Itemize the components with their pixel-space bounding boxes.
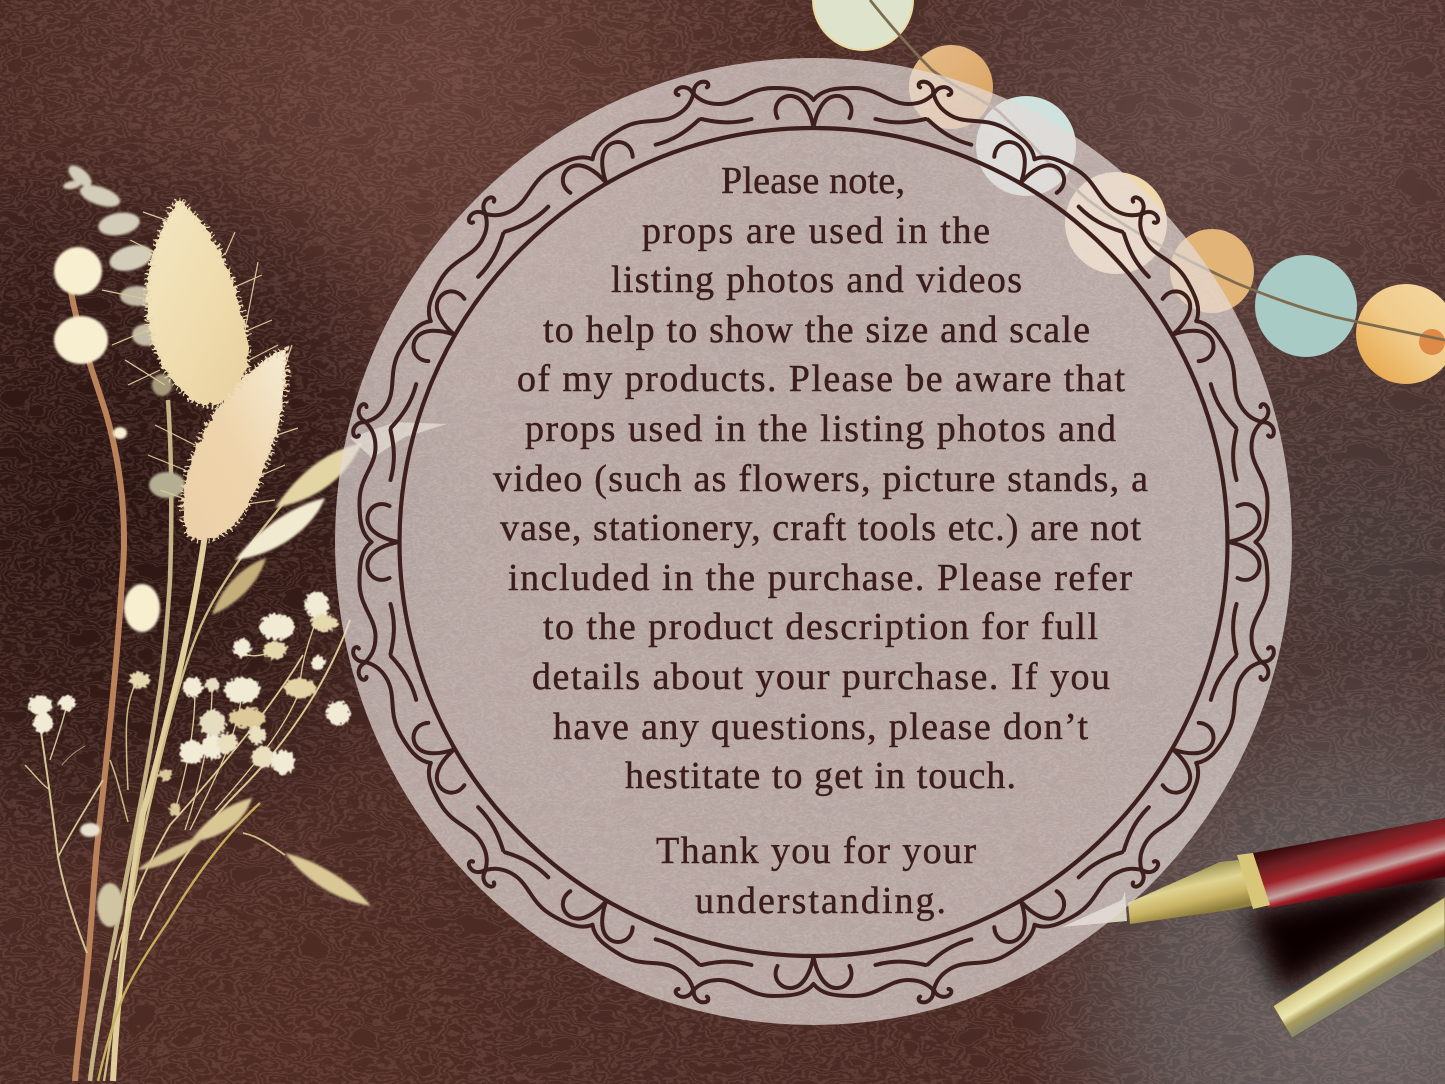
stems [25, 292, 350, 1081]
shell disc 2 [909, 45, 993, 129]
notice text: have any questions, please don’t [553, 706, 1088, 748]
fountain pen [1062, 818, 1445, 1038]
scroll ornaments [351, 79, 1276, 1005]
baby's breath clusters [28, 591, 350, 816]
notice text: understanding. [695, 880, 946, 922]
willow buds [54, 247, 160, 927]
bunny tail grass 2 [148, 345, 298, 540]
shell disc 7 [1356, 284, 1445, 384]
shell disc 6 [1255, 255, 1357, 357]
dried flower bouquet [25, 162, 371, 1081]
pen cap [1273, 897, 1445, 1038]
bunny tail grass 1 [102, 200, 278, 405]
notice text: details about your purchase. If you [532, 656, 1110, 698]
notice text: props used in the listing photos and [525, 408, 1116, 450]
notice text: Thank you for your [656, 830, 976, 872]
translucent circular panel [335, 58, 1292, 1025]
pale feather overlay [350, 422, 447, 458]
gold grip [1128, 860, 1256, 924]
notice text: hestitate to get in touch. [625, 755, 1016, 797]
shell disc 4 [1065, 172, 1167, 274]
notice text: to the product description for full [543, 606, 1098, 648]
shell disc 3 [976, 96, 1076, 196]
gold ring [1237, 853, 1270, 909]
oat spikelets [137, 443, 371, 906]
inner ring [400, 128, 1228, 956]
pen body [1253, 818, 1445, 908]
notice text: vase, stationery, craft tools etc.) are not [500, 507, 1141, 549]
notice text: video (such as flowers, picture stands, a [493, 458, 1148, 500]
string [870, 0, 1445, 340]
notice text: props are used in the [642, 210, 990, 252]
shell disc 1 [813, 0, 913, 50]
ornamental frame [351, 79, 1276, 1005]
notice text: to help to show the size and scale [543, 309, 1090, 351]
notice text: Please note, [721, 160, 905, 202]
notice text: of my products. Please be aware that [517, 358, 1125, 400]
shell bead string [813, 0, 1445, 384]
notice text [493, 160, 1148, 922]
notice text: included in the purchase. Please refer [508, 557, 1132, 599]
lavender sprig [62, 162, 185, 498]
nib [1062, 891, 1127, 927]
notice text: listing photos and videos [611, 259, 1022, 301]
shell disc 5 [1170, 229, 1254, 313]
pen shadow [1245, 868, 1445, 995]
